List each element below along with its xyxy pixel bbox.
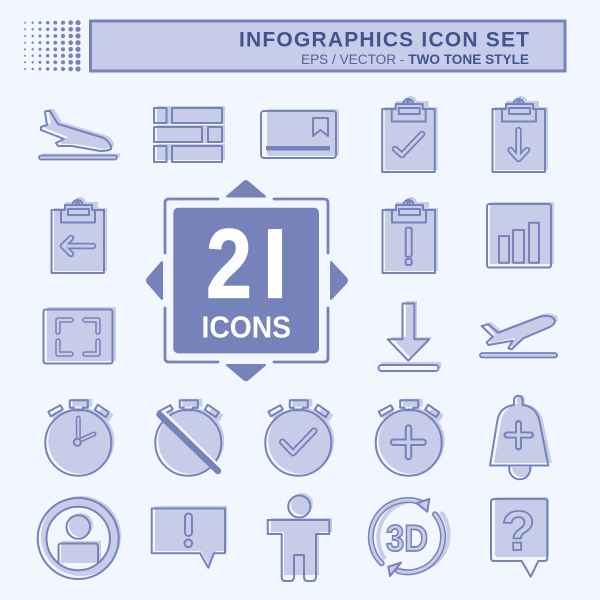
frame [165,199,328,362]
direction triangles [147,181,347,380]
icon: brick wall [154,106,225,162]
icon: user in circle [38,496,121,579]
number 21 [206,208,288,318]
icon: 3D rotation: 3D [386,518,428,559]
icon: stopwatch clock [45,399,114,476]
icon: stopwatch check [265,399,334,476]
icon: person standing [268,493,332,581]
blue panel [173,208,319,353]
icon: clipboard down arrow [492,96,548,172]
icon: speech bubble question [491,497,549,577]
icon: stopwatch disabled [155,399,224,476]
icon: 3D rotation [371,499,449,576]
icon: clipboard exclamation [382,197,438,273]
number 21: 2 [206,208,252,318]
subtitle: EPS / VECTOR - TWO TONE STYLE [301,52,529,67]
icon: plane landing [39,109,120,160]
central badge: 21 icons [147,181,347,380]
icon: clipboard left arrow [52,197,107,273]
title: INFOGRAPHICS ICON SET [239,28,529,52]
icon: bell plus [490,395,552,479]
icon: card with bookmark [261,109,339,158]
number 21: I [262,208,288,318]
icon: clipboard check [382,96,438,172]
icon: bar chart [487,202,554,268]
label: icons: ICONS [202,310,291,344]
icon: download arrow [378,301,441,371]
halftone dot pattern [24,20,81,72]
icon: expand frame [44,307,116,364]
icon: stopwatch plus [376,399,445,476]
icon: speech bubble exclamation [152,506,227,568]
icon: plane takeoff [480,314,558,358]
header banner [90,21,565,71]
icon: speech bubble question: ? [501,499,535,562]
